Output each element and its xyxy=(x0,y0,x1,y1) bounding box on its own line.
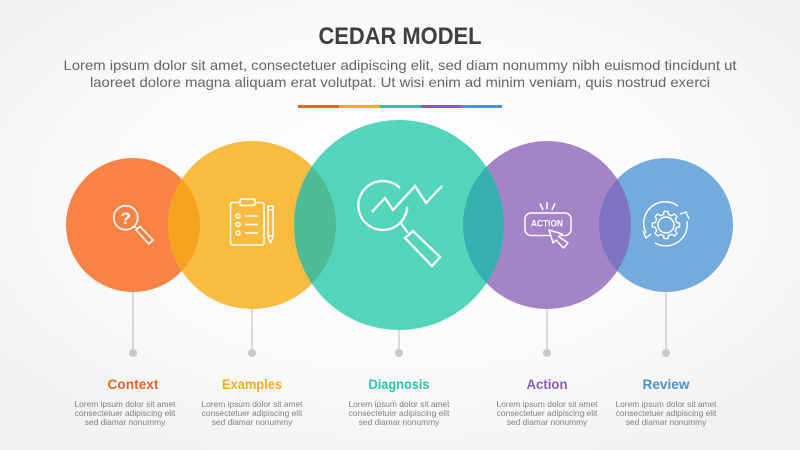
label: Review xyxy=(615,376,717,427)
label: Examples: consectetuer adipiscing elit xyxy=(202,408,303,418)
label: Diagnosis xyxy=(348,376,450,427)
title: CEDAR MODEL xyxy=(318,23,482,50)
label: Action: sed diamar nonummy xyxy=(507,417,588,427)
label: Action: consectetuer adipiscing elit xyxy=(497,408,598,418)
icon: action button with cursor xyxy=(525,202,571,248)
label: Diagnosis: Lorem ipsum dolor sit amet xyxy=(348,399,450,409)
subtitle text: laoreet dolore magna aliquam erat volutpat. Ut wisi enim ad minim veniam, quis nostrud exerci xyxy=(90,74,710,90)
label: Review: Lorem ipsum dolor sit amet xyxy=(615,399,717,409)
label: Diagnosis: sed diamar nonummy xyxy=(359,417,440,427)
label: Context: consectetuer adipiscing elit xyxy=(75,408,176,418)
label: Context: Lorem ipsum dolor sit amet xyxy=(74,399,176,409)
label: Review: consectetuer adipiscing elit xyxy=(616,408,717,418)
subtitle text xyxy=(64,57,737,90)
icon: clipboard checklist xyxy=(230,199,273,245)
label: Action: Action xyxy=(526,376,568,392)
icon: magnifier with question mark xyxy=(114,206,153,244)
icon: magnifier with question mark: ? xyxy=(121,209,131,228)
label: Context: Context xyxy=(108,376,159,392)
label: Action: Lorem ipsum dolor sit amet xyxy=(496,399,598,409)
label: Context xyxy=(74,376,176,427)
label: Examples: Lorem ipsum dolor sit amet xyxy=(201,399,303,409)
circles chain xyxy=(66,120,733,330)
subtitle text: Lorem ipsum dolor sit amet, consectetuer adipiscing elit, sed diam nonummy nibh euismod tincidunt ut xyxy=(64,57,737,73)
label: Review: Review xyxy=(642,376,690,392)
label: Action xyxy=(496,376,598,427)
label: Review: sed diamar nonummy xyxy=(626,417,707,427)
colored divider bar xyxy=(298,105,502,108)
label: Diagnosis: Diagnosis xyxy=(368,376,430,392)
icon: magnifier with trend line xyxy=(358,181,442,266)
label: Context: sed diamar nonummy xyxy=(85,417,166,427)
connector stems and dots xyxy=(129,290,670,357)
label: Examples: Examples xyxy=(222,376,282,392)
label: Diagnosis: consectetuer adipiscing elit xyxy=(349,408,450,418)
icon: action button with cursor: ACTION xyxy=(531,218,563,228)
label: Examples xyxy=(201,376,303,427)
icon: gear with cycle arrows xyxy=(643,202,689,246)
label: Examples: sed diamar nonummy xyxy=(212,417,293,427)
